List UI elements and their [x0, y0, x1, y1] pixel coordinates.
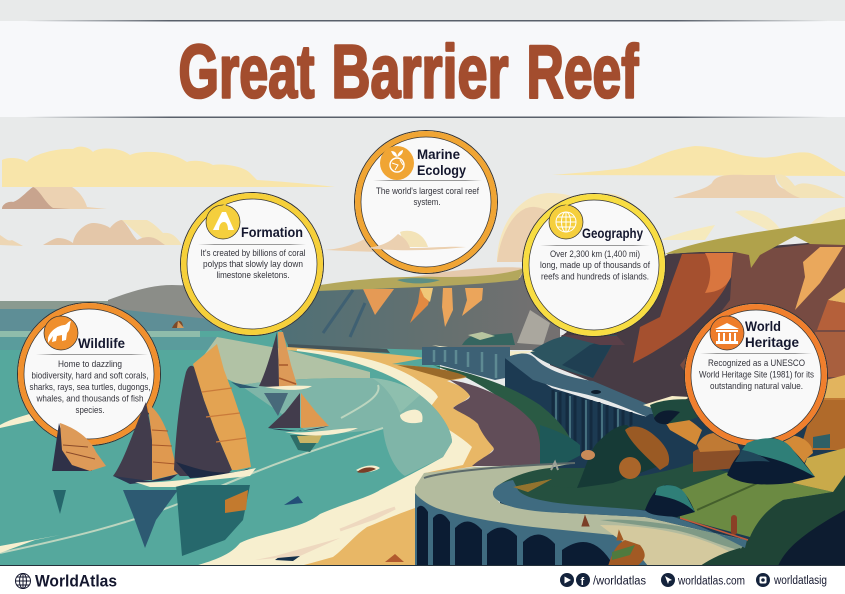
- heading: Marine Ecology: Marine: [417, 147, 460, 162]
- text: Geography body: [540, 249, 650, 282]
- text: Marine Ecology body: system.: [414, 197, 440, 208]
- text: Marine Ecology body: The world's largest coral reef: [376, 186, 479, 197]
- icon: heritage temple: [710, 316, 744, 350]
- icon: coral globe: [380, 146, 414, 180]
- text: Geography body: Over 2,300 km (1,400 mi): [550, 249, 640, 260]
- heading: World Heritage: World: [745, 319, 781, 334]
- right cliffs: [530, 219, 845, 452]
- footer: [0, 566, 845, 594]
- top band: [0, 0, 845, 21]
- heading: Geography: Geography: [582, 226, 643, 241]
- icon: cursor: [661, 573, 675, 587]
- title: Reef: [526, 30, 639, 114]
- social links: /worldatlas: [593, 576, 646, 588]
- cloud seen through bubble: [366, 231, 466, 250]
- text: World Heritage body: [699, 358, 814, 392]
- sea: [0, 301, 440, 566]
- text: Geography body: long, made up of thousands of: [540, 260, 650, 271]
- title: Barrier: [332, 30, 508, 114]
- bubble: Geography: [522, 194, 666, 336]
- social links: worldatlas.com: [677, 576, 745, 588]
- sandy beach: [0, 321, 494, 566]
- icon: logo globe: [16, 574, 30, 588]
- text: Formation body: polyps that slowly lay down: [203, 259, 303, 270]
- title: [178, 30, 639, 114]
- footer logo: [16, 572, 117, 590]
- text: Wildlife body: Home to dazzling: [58, 359, 122, 370]
- social links: [560, 573, 827, 588]
- footer rule under scene: [0, 565, 845, 566]
- text: Geography body: reefs and hundreds of islands.: [541, 272, 649, 282]
- bubble: Wildlife: [18, 302, 160, 446]
- distant mountains: [108, 285, 340, 330]
- icon: cave arch: [206, 204, 240, 239]
- heading: Marine Ecology: [417, 147, 466, 178]
- icon: globe: [549, 204, 583, 239]
- title band: [0, 20, 845, 117]
- bubble: Formation: [180, 192, 324, 336]
- foreground teal rocks: [645, 438, 815, 517]
- heading: Formation: Formation: [241, 225, 303, 240]
- heading: World Heritage: [745, 319, 799, 350]
- icon: video: [560, 573, 574, 587]
- text: Wildlife body: biodiversity, hard and soft corals,: [32, 370, 148, 382]
- bubble: World Heritage: [684, 304, 828, 446]
- text: Marine Ecology body: [376, 186, 479, 208]
- wordmark: WorldAtlas: [35, 572, 117, 590]
- foreground sea stacks: [52, 332, 358, 487]
- green and purple slopes: [397, 365, 580, 470]
- text: Formation body: limestone skeletons.: [216, 270, 290, 281]
- text: Wildlife body: [30, 359, 150, 416]
- heading: Wildlife: Wildlife: [78, 336, 125, 351]
- icon: instagram: [756, 573, 770, 587]
- illustrated coastal scene: [0, 116, 845, 566]
- mid road and bridge: [422, 345, 690, 465]
- lower land: [500, 399, 845, 566]
- social links: worldatlasig: [773, 575, 827, 587]
- bubble: Marine Ecology: [354, 130, 498, 274]
- text: Wildlife body: whales, and thousands of fish: [36, 394, 144, 404]
- clouds: [0, 146, 845, 262]
- heading: Marine Ecology: Ecology: [417, 163, 466, 178]
- text: World Heritage body: World Heritage Site (1981) for its: [699, 370, 814, 380]
- icon: facebook: [576, 573, 590, 588]
- text: Wildlife body: sharks, rays, sea turtles, dugongs,: [30, 382, 150, 393]
- winding road and arched viaduct: [415, 462, 760, 566]
- text: Formation body: It's created by billions of coral: [200, 248, 306, 259]
- heading: World Heritage: Heritage: [745, 335, 799, 350]
- text: World Heritage body: outstanding natural value.: [710, 381, 803, 392]
- icon: facebook: f: [580, 576, 584, 588]
- reflections: [53, 393, 322, 556]
- text: Wildlife body: species.: [76, 405, 104, 416]
- back cliff: [280, 267, 560, 353]
- text: World Heritage body: Recognized as a UNESCO: [708, 358, 805, 369]
- title: Great: [178, 30, 315, 114]
- text: Formation body: [200, 248, 306, 281]
- icon: wildlife animal: [44, 316, 78, 350]
